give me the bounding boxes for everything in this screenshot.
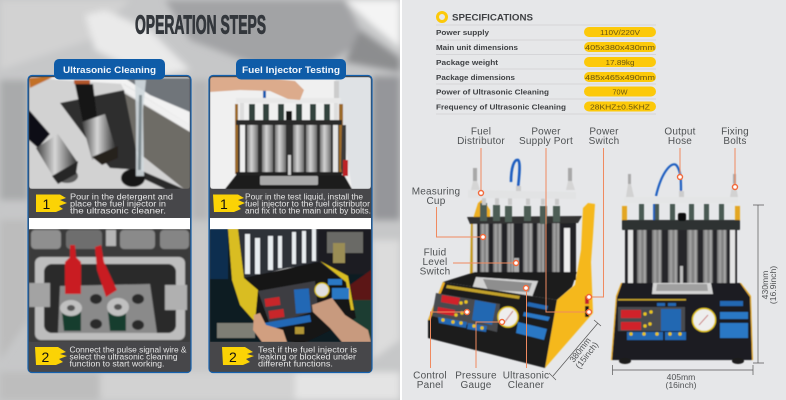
- caption: step 2: 2: [229, 349, 237, 365]
- specifications table: Frequency of Ultrasonic Cleaning: [436, 102, 566, 112]
- callouts: front machine labels: [664, 126, 749, 190]
- injectors and distributor: [480, 203, 560, 224]
- label: fuel distributor: Fuel: [471, 126, 491, 138]
- label: power switch: Power: [589, 126, 619, 138]
- photo: red pulse connectors in tank: [29, 229, 190, 342]
- caption: step 2: [29, 342, 190, 372]
- callouts: angled machine labels: [412, 126, 619, 391]
- specifications table: Package dimensions: [436, 73, 515, 82]
- label: ultrasonic cleaner: Ultrasonic: [503, 370, 549, 382]
- label: power switch: Switch: [589, 136, 619, 147]
- label: output hose: Hose: [668, 136, 692, 147]
- label: output hose: [664, 126, 696, 180]
- label: power supply port: Power: [531, 126, 561, 138]
- label: power supply port: [519, 126, 592, 314]
- label: output hose: Output: [664, 126, 696, 138]
- machine: angled view: [428, 160, 595, 368]
- caption: step 1: and fix it to the main unit by bolts.: [245, 206, 371, 216]
- caption: step 1: fuel injector to the fuel distributor: [245, 200, 370, 208]
- caption: step 1: Pour in the test liquid, install the: [245, 192, 363, 202]
- photo: operating the control panel: [210, 229, 371, 345]
- label: fluid level switch: [420, 248, 518, 278]
- dimension: height 430mm: [753, 205, 778, 363]
- label: fuel distributor: [457, 126, 505, 196]
- label: fuel distributor: Distributor: [457, 136, 505, 147]
- caption: step 1: place the fuel injector in: [70, 200, 166, 208]
- caption: step 2: Test if the fuel injector is: [258, 346, 357, 354]
- label: ultrasonic cleaner: [503, 286, 549, 391]
- label: fixing bolts: [721, 126, 749, 190]
- dimension: height 430mm: (16.9inch): [768, 266, 778, 304]
- panel: ultrasonic cleaning: [28, 76, 191, 372]
- label: fluid level switch: Level: [423, 257, 447, 268]
- label: fluid level switch: Switch: [420, 266, 450, 278]
- water stream: [135, 80, 146, 176]
- left background: engine photo: [0, 0, 400, 400]
- specifications table: Power of Ultrasonic Cleaning: [436, 88, 549, 96]
- title: operation steps: OPERATION STEPS: [135, 10, 266, 40]
- right background: [402, 0, 786, 400]
- heading pill: ultrasonic cleaning: [54, 59, 165, 80]
- specifications table: 70W: [612, 88, 628, 96]
- label: measuring cup: Cup: [427, 196, 446, 207]
- specifications table: 110V/220V: [600, 28, 641, 37]
- label: measuring cup: [412, 186, 486, 240]
- specifications table: 17.89kg: [606, 58, 634, 67]
- label: fixing bolts: Bolts: [723, 136, 747, 147]
- heading pill: ultrasonic cleaning: Ultrasonic Cleaning: [63, 65, 156, 76]
- specifications table: Main unit dimensions: [436, 43, 518, 52]
- specifications table: Package weight: [436, 58, 499, 67]
- dimension: width 405mm: [612, 365, 753, 390]
- back yellow side panel: [472, 199, 490, 222]
- control front: [428, 282, 557, 368]
- dimension: width 405mm: 405mm: [667, 372, 695, 382]
- caption: step 1: 1: [220, 196, 228, 212]
- label: fixing bolts: Fixing: [721, 126, 749, 138]
- heading: specifications: SPECIFICATIONS: [452, 12, 533, 22]
- photo: installing injectors: [210, 77, 371, 189]
- specifications table: 28KHZ±0.5KHZ: [590, 102, 650, 112]
- label: pressure gauge: [455, 320, 504, 391]
- label: power supply port: Supply Port: [519, 136, 573, 147]
- specifications table: 405x380x430mm: [585, 43, 655, 52]
- caption: step 1: Pour in the detergent and: [70, 192, 173, 202]
- label: fluid level switch: Fluid: [424, 248, 446, 258]
- specifications table: 485x465x490mm: [585, 73, 655, 82]
- caption: step 2: different functions.: [258, 360, 333, 368]
- label: pressure gauge: Pressure: [455, 370, 497, 382]
- photo: detergent pouring into tank: [29, 76, 190, 189]
- caption: step 2: 2: [42, 349, 50, 365]
- panel: fuel injector testing: [209, 76, 372, 372]
- level switch and tank: [514, 258, 519, 275]
- caption: step 1: the ultrasonic cleaner.: [70, 206, 166, 216]
- caption: step 1: 1: [42, 196, 50, 212]
- tube housing: [474, 222, 576, 280]
- caption: step 1: [210, 189, 371, 218]
- caption: step 2: Connect the pulse signal wire &: [70, 346, 187, 354]
- machine: front view: [611, 164, 753, 364]
- label: measuring cup: Measuring: [412, 186, 460, 198]
- dimension: width 405mm: (16inch): [665, 380, 697, 390]
- heading pill: fuel injector testing: [236, 59, 346, 80]
- caption: step 2: function to start working.: [70, 360, 164, 368]
- injector right: [75, 84, 97, 122]
- heading pill: fuel injector testing: Fuel Injector Testing: [242, 65, 340, 76]
- specifications table: [436, 12, 656, 114]
- dimension: depth 380mm: (15inch): [573, 340, 600, 370]
- caption: step 2: leaking or blocked under: [258, 352, 356, 362]
- label: pressure gauge: Gauge: [460, 380, 492, 391]
- specifications table: Power supply: [436, 28, 490, 37]
- caption: step 2: select the ultrasonic cleaning: [70, 352, 178, 362]
- caption: step 1: [29, 189, 190, 218]
- injector left: [29, 110, 50, 148]
- label: control panel: [413, 310, 470, 391]
- caption: step 2: [210, 342, 371, 372]
- label: control panel: Panel: [417, 380, 443, 391]
- label: power switch: [586, 126, 619, 300]
- dimension: depth 380mm: [549, 320, 601, 380]
- label: control panel: Control: [413, 370, 447, 382]
- dimension: depth 380mm: 380mm: [567, 336, 593, 364]
- label: ultrasonic cleaner: Cleaner: [508, 380, 545, 391]
- dimension: height 430mm: 430mm: [760, 271, 770, 299]
